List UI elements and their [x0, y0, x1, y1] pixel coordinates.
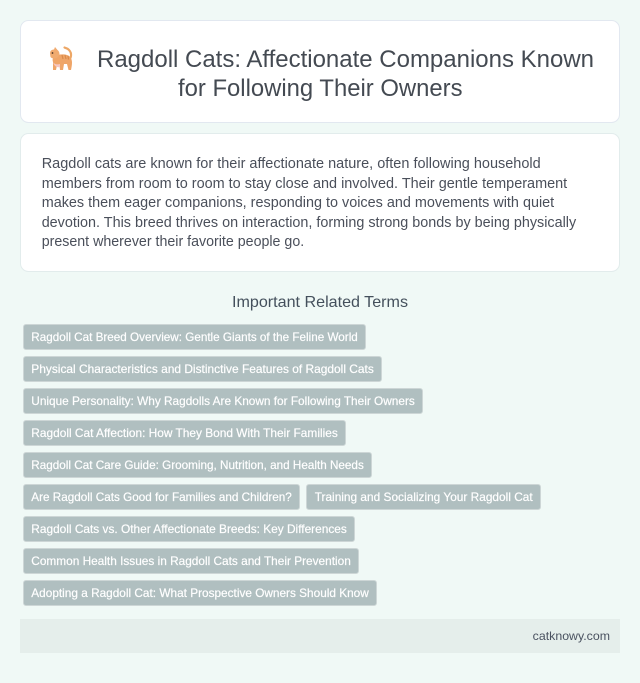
chip 9 [24, 548, 358, 574]
title [97, 46, 594, 102]
description text: devotion. This breed thrives on interaction, forming strong bonds by being physically [42, 214, 577, 231]
chip 4: Ragdoll Cat Affection: How They Bond With Their Families [31, 426, 338, 440]
chip 9: Common Health Issues in Ragdoll Cats and Their Prevention [31, 554, 351, 568]
title: Ragdoll Cats: Affectionate Companions Known [97, 46, 594, 73]
title: for Following Their Owners [178, 75, 462, 102]
description text: makes them eager companions, responding to voices and movements with quiet [42, 194, 555, 211]
chip 5: Ragdoll Cat Care Guide: Grooming, Nutrition, and Health Needs [31, 458, 364, 472]
chip 4 [24, 420, 346, 446]
chip 3: Unique Personality: Why Ragdolls Are Known for Following Their Owners [31, 394, 415, 408]
header panel [20, 20, 620, 122]
footer site name: catknowy.com [533, 629, 610, 643]
chip 8: Ragdoll Cats vs. Other Affectionate Breeds: Key Differences [31, 522, 347, 536]
footer [20, 619, 620, 653]
panel: description [20, 134, 620, 272]
chip 6: Are Ragdoll Cats Good for Families and Children? [31, 490, 292, 504]
chip 2: Physical Characteristics and Distinctive Features of Ragdoll Cats [31, 362, 374, 376]
description text: Ragdoll cats are known for their affectionate nature, often following household [42, 155, 541, 172]
chip 2 [24, 356, 382, 382]
chip 7 [306, 484, 540, 510]
chip 1: Ragdoll Cat Breed Overview: Gentle Giants of the Feline World [31, 330, 358, 344]
chip 6 [24, 484, 300, 510]
related terms chips [24, 324, 540, 606]
chip 10 [24, 580, 376, 606]
icon: cat [50, 47, 72, 70]
heading: important related terms: Important Related Terms [232, 294, 408, 311]
description text: present wherever their favorite people go. [42, 233, 304, 250]
chip 7: Training and Socializing Your Ragdoll Cat [315, 490, 533, 504]
description text [42, 155, 577, 250]
chip 8 [24, 516, 354, 542]
description text: members from room to room to stay close and involved. Their gentle temperament [42, 175, 568, 192]
chip 5 [24, 452, 372, 478]
chip 1 [24, 324, 366, 350]
chip 10: Adopting a Ragdoll Cat: What Prospective Owners Should Know [31, 586, 369, 600]
chip 3 [24, 388, 422, 414]
